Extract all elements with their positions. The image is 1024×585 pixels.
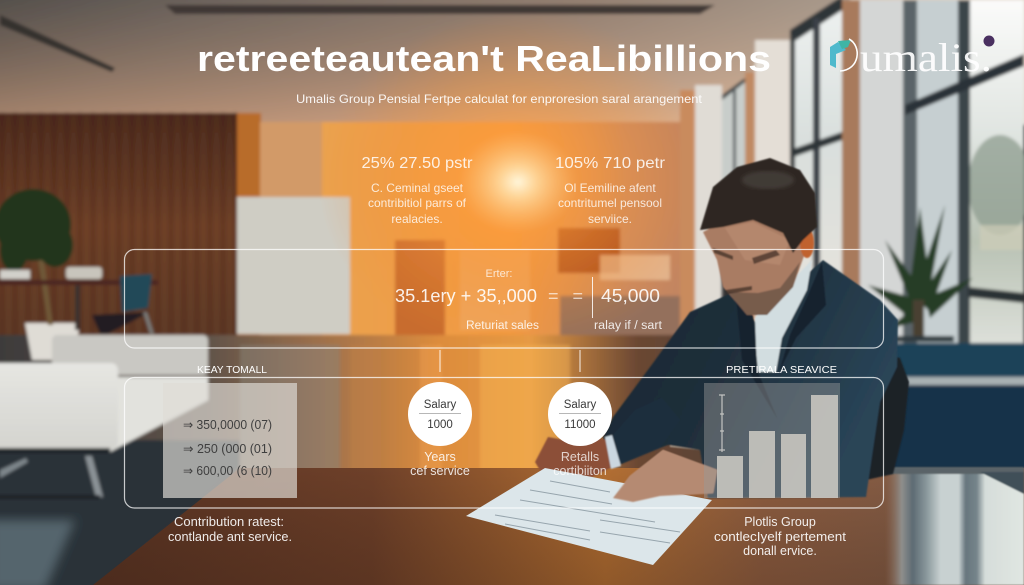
stat value: 25% 27.50 pstr xyxy=(362,155,473,172)
circle badge xyxy=(408,382,472,446)
chart background xyxy=(704,383,840,498)
lapels xyxy=(736,262,826,420)
logo wordmark: umalis. xyxy=(860,35,992,80)
stat description: serviice. xyxy=(588,212,632,226)
caption xyxy=(553,450,607,478)
left dark floor xyxy=(0,440,240,585)
formula label: Erter: xyxy=(486,268,512,280)
caption xyxy=(410,450,470,478)
stat description xyxy=(368,181,467,226)
axis xyxy=(719,395,725,452)
caption: Retalls xyxy=(561,450,599,464)
right wall and windows xyxy=(680,0,1024,350)
equals signs: = = xyxy=(548,286,583,306)
badge text: Salary xyxy=(564,399,597,411)
white sofa xyxy=(0,335,208,499)
shirt collar xyxy=(755,260,812,372)
window reflection on table xyxy=(885,467,1024,585)
caption: donall ervice. xyxy=(743,544,817,558)
logo mark xyxy=(830,39,857,71)
neck and face xyxy=(703,215,805,315)
badge text xyxy=(559,399,601,431)
caption: Plotlis Group xyxy=(744,515,816,529)
orange wall xyxy=(237,113,700,338)
stat left xyxy=(362,155,473,226)
floor reflections xyxy=(240,345,570,470)
teal sofa xyxy=(888,343,1024,469)
hand over document xyxy=(613,450,717,502)
person reading document xyxy=(535,158,909,502)
frames xyxy=(124,250,884,508)
whiteboard xyxy=(237,197,350,334)
panel heading: KEAY TOMALL xyxy=(197,364,267,376)
forehead highlight xyxy=(725,222,790,265)
side table and chair xyxy=(0,267,158,334)
document on table xyxy=(466,468,712,565)
panel: service bar chart xyxy=(704,364,847,558)
chair back xyxy=(866,354,909,480)
table rows: ⇒ 350,0000 (07) xyxy=(183,418,272,432)
table xyxy=(93,467,1024,585)
hair highlight xyxy=(742,171,794,189)
ceiling light strips xyxy=(0,5,715,72)
logo xyxy=(830,35,994,80)
formula result: 45,000 xyxy=(601,286,660,306)
panel heading: PRETIRALA SEAVICE xyxy=(726,364,837,376)
stat description: contribitiol parrs of xyxy=(368,196,467,210)
formula xyxy=(395,268,663,332)
glow xyxy=(318,12,718,490)
gap behind arm xyxy=(667,415,700,450)
caption xyxy=(714,515,847,558)
badge text xyxy=(419,399,461,431)
caption: contlecIyelf pertement xyxy=(714,530,847,544)
caption right: ralay if / sart xyxy=(594,320,663,332)
stat description: realacies. xyxy=(391,212,443,226)
circle: years of service xyxy=(408,382,472,478)
ceiling xyxy=(0,0,1024,125)
stat description xyxy=(558,181,662,226)
table box xyxy=(163,383,297,498)
suit jacket xyxy=(603,260,898,498)
circle: retails contribution xyxy=(548,382,612,478)
caption: contlande ant service. xyxy=(168,530,292,544)
subtitle: Umalis Group Pensial Fertpe calculat for enproresion saral arangement xyxy=(296,92,703,106)
ear xyxy=(800,228,814,258)
right plant xyxy=(868,205,973,342)
hair xyxy=(700,158,817,253)
caption: cef service xyxy=(410,464,470,478)
caption: Contribution ratest: xyxy=(174,515,284,529)
table rows: ⇒ 250 (000 (01) xyxy=(183,442,272,456)
title: retreeteautean't ReaLibillions xyxy=(197,38,771,79)
stat description: Ol Eemiline afent xyxy=(564,181,656,195)
left arm sleeve xyxy=(612,398,680,468)
back room details xyxy=(395,228,700,356)
circle badge xyxy=(548,382,612,446)
panel: key table xyxy=(163,364,297,544)
logo badge xyxy=(984,36,994,46)
formula left: 35.1ery + 35,,000 xyxy=(395,286,537,306)
bars xyxy=(717,395,838,498)
hands xyxy=(535,437,717,502)
badge text: 1000 xyxy=(427,419,453,431)
floor xyxy=(0,335,890,475)
divider xyxy=(592,277,594,318)
cuff xyxy=(605,435,621,469)
badge text: 11000 xyxy=(564,419,596,431)
wood wall xyxy=(0,113,238,338)
eyes and brow xyxy=(713,248,780,294)
beard shadow xyxy=(728,262,800,315)
table rows xyxy=(183,418,272,478)
stat description: contritumel pensool xyxy=(558,196,662,210)
caption left: Returiat sales xyxy=(466,320,539,332)
table rows: ⇒ 600,00 (6 (10) xyxy=(183,464,272,478)
caption: cortibiiton xyxy=(553,464,607,478)
stat description: C. Ceminal gseet xyxy=(371,181,464,195)
stat value: 105% 710 petr xyxy=(555,155,666,172)
caption xyxy=(168,515,292,544)
left plant xyxy=(0,189,80,360)
stat right xyxy=(555,155,666,226)
badge text: Salary xyxy=(424,399,457,411)
caption: Years xyxy=(424,450,456,464)
